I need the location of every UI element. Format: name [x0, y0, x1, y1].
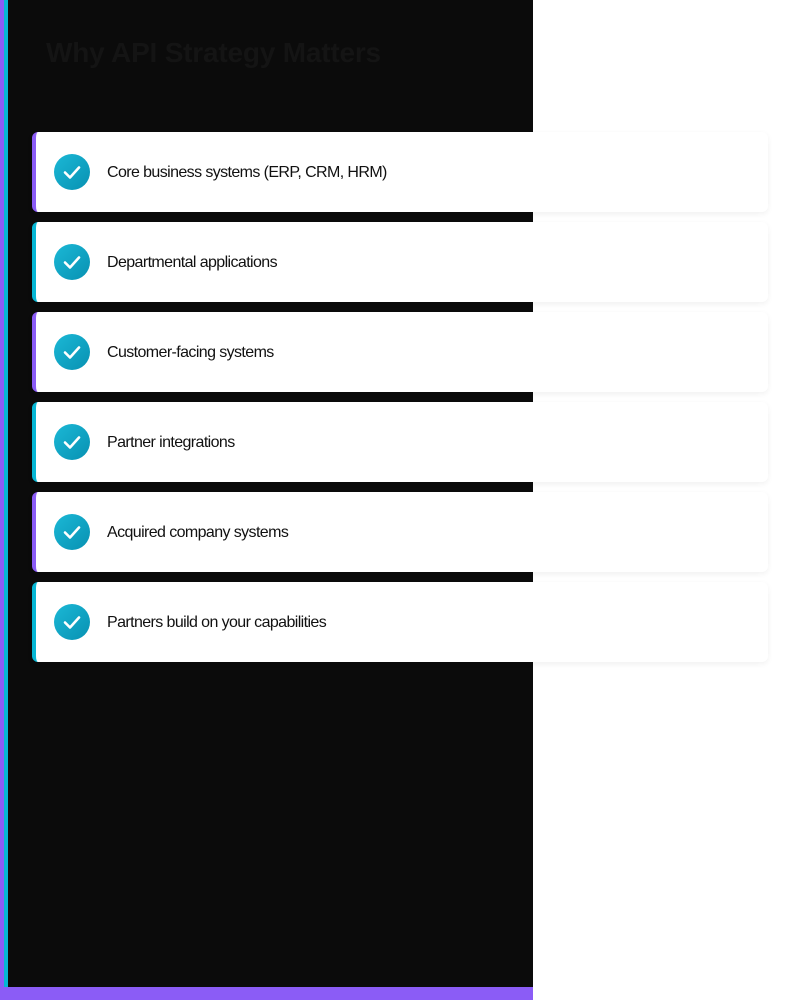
left accent strip: [0, 0, 4, 987]
bottom accent bar: [0, 987, 533, 1000]
icon: check: [54, 424, 90, 460]
icon: check: [54, 244, 90, 280]
text: Acquired company systems: [107, 524, 288, 541]
card: partner integrations: [32, 402, 768, 482]
icon: check: [54, 334, 90, 370]
icon: check: [54, 514, 90, 550]
text: Core business systems (ERP, CRM, HRM): [107, 164, 387, 181]
dark background panel: [0, 0, 533, 1000]
icon: check: [54, 154, 90, 190]
card: departmental applications: [32, 222, 768, 302]
text: Customer-facing systems: [107, 344, 274, 361]
icon: check: [54, 604, 90, 640]
card: partners build on your capabilities: [32, 582, 768, 662]
text: Partners build on your capabilities: [107, 614, 326, 631]
text: Departmental applications: [107, 254, 277, 271]
card: customer-facing systems: [32, 312, 768, 392]
title: Why API Strategy Matters: [46, 37, 381, 68]
card: acquired company systems: [32, 492, 768, 572]
card: core business systems: [32, 132, 768, 212]
text: Partner integrations: [107, 434, 235, 451]
